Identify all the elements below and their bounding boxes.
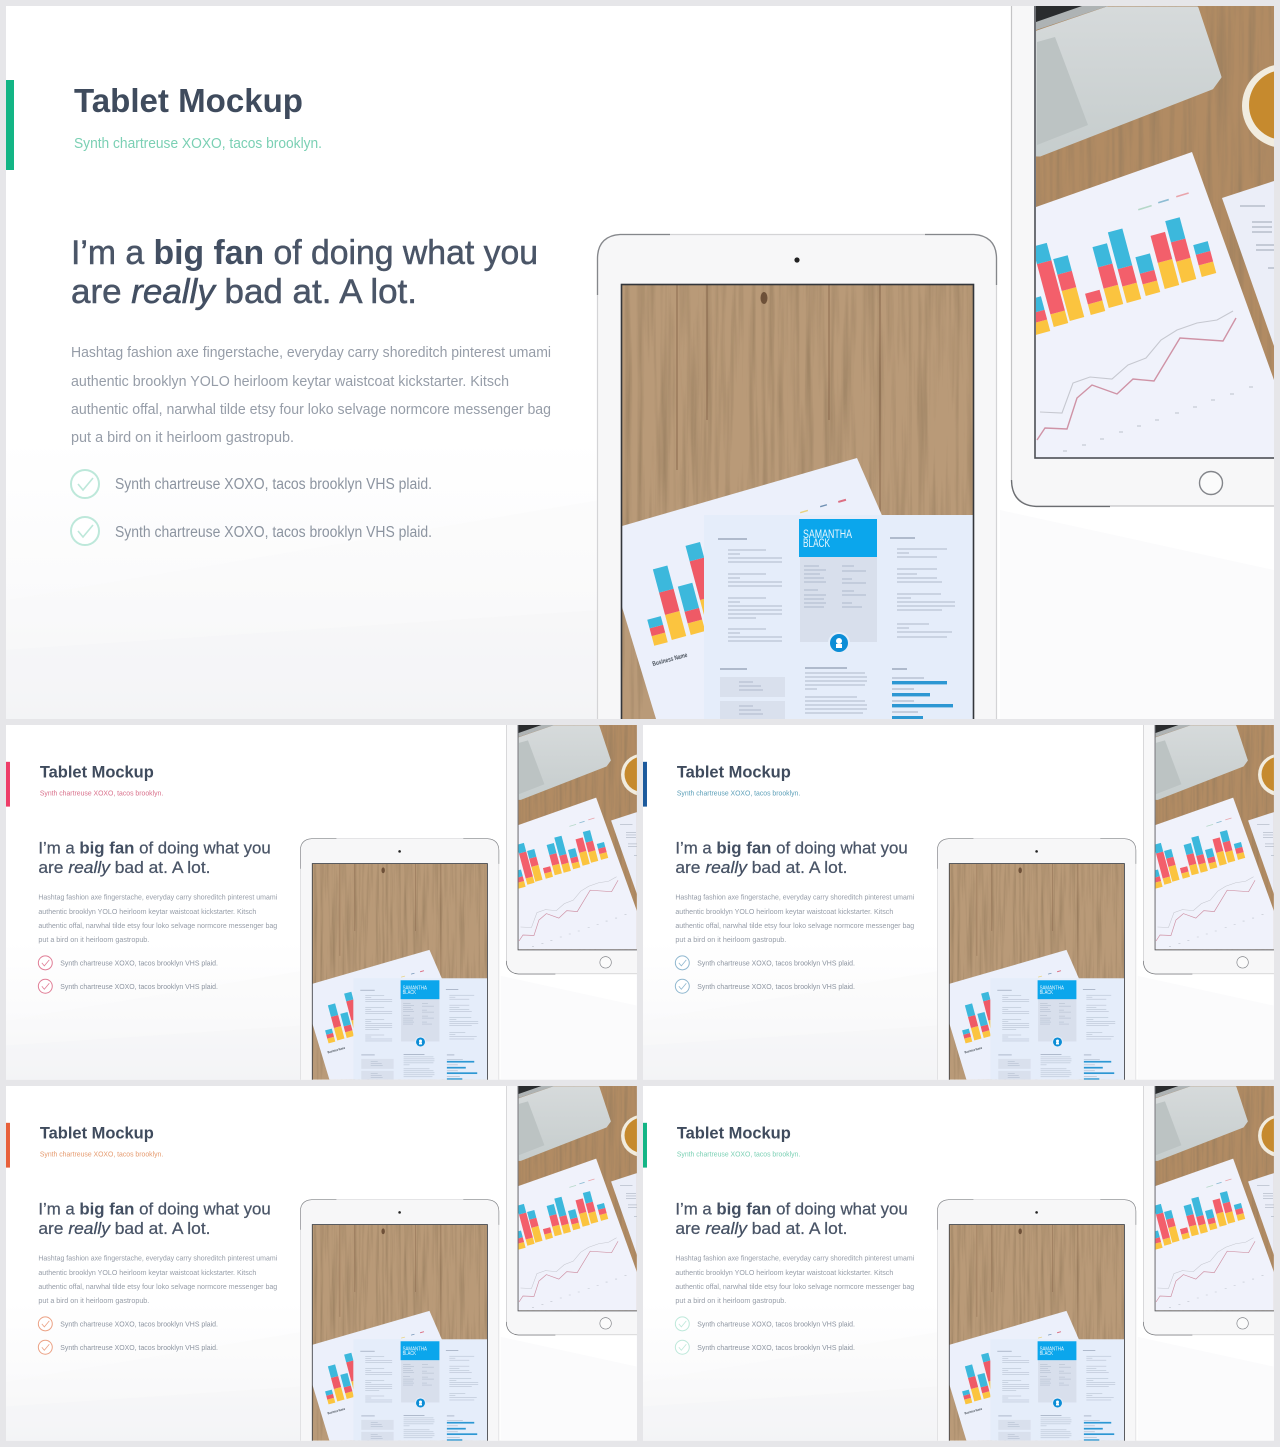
panel: large slide with green accent	[6, 0, 1280, 794]
body text: put a bird on it heirloom gastropub.	[38, 1296, 149, 1305]
heading: I’m a big fan of doing what you	[675, 1199, 908, 1218]
check item 2	[38, 979, 218, 993]
body text: authentic brooklyn YOLO heirloom keytar waistcoat kickstarter. Kitsch	[675, 907, 893, 916]
check item 1	[675, 956, 855, 970]
body text: Hashtag fashion axe fingerstache, everyday carry shoreditch pinterest umami	[71, 345, 551, 361]
body text: authentic brooklyn YOLO heirloom keytar waistcoat kickstarter. Kitsch	[38, 1268, 256, 1277]
tablets with photo art	[6, 1063, 671, 1447]
check item 2: Synth chartreuse XOXO, tacos brooklyn VHS plaid.	[697, 1343, 855, 1352]
title: Tablet Mockup	[40, 764, 154, 782]
title: Tablet Mockup	[677, 1125, 791, 1143]
check item 2	[38, 1340, 218, 1354]
resume surname: BLACK	[403, 990, 416, 996]
accent bar	[643, 1123, 647, 1168]
heading	[675, 1199, 908, 1238]
heading	[38, 838, 271, 877]
panel: small slide orange	[6, 1063, 671, 1447]
check item 1	[38, 1317, 218, 1331]
subtitle: Synth chartreuse XOXO, tacos brooklyn.	[677, 789, 800, 798]
heading: I’m a big fan of doing what you	[71, 234, 538, 272]
body text: put a bird on it heirloom gastropub.	[675, 1296, 786, 1305]
subtitle: Synth chartreuse XOXO, tacos brooklyn.	[74, 136, 322, 152]
check item 1	[38, 956, 218, 970]
accent bar	[6, 80, 14, 170]
resume surname: BLACK	[403, 1351, 416, 1357]
paper label: Business Name	[964, 1046, 983, 1054]
resume name: SAMANTHA	[403, 1347, 427, 1353]
heading: are really bad at. A lot.	[71, 273, 417, 311]
body text: put a bird on it heirloom gastropub.	[675, 935, 786, 944]
body text	[675, 893, 915, 944]
body text: authentic offal, narwhal tilde etsy four loko selvage normcore messenger bag	[675, 921, 914, 930]
paper label: Business Name	[327, 1407, 346, 1415]
check item 2	[675, 1340, 855, 1354]
heading	[38, 1199, 271, 1238]
tablets with photo art	[6, 0, 1280, 794]
check item 1: Synth chartreuse XOXO, tacos brooklyn VHS plaid.	[115, 476, 432, 493]
paper label: Business Name	[652, 652, 689, 668]
body text: Hashtag fashion axe fingerstache, everyday carry shoreditch pinterest umami	[675, 1254, 915, 1263]
panel: small slide pink	[6, 702, 671, 1117]
check item 2: Synth chartreuse XOXO, tacos brooklyn VHS plaid.	[697, 982, 855, 991]
heading: I’m a big fan of doing what you	[675, 838, 908, 857]
resume name: SAMANTHA	[403, 986, 427, 992]
resume name: SAMANTHA	[1040, 986, 1064, 992]
heading	[675, 838, 908, 877]
body text: authentic brooklyn YOLO heirloom keytar waistcoat kickstarter. Kitsch	[71, 374, 509, 390]
resume surname: BLACK	[1040, 1351, 1053, 1357]
body text: Hashtag fashion axe fingerstache, everyday carry shoreditch pinterest umami	[38, 1254, 278, 1263]
panel: small slide blue	[643, 702, 1280, 1117]
heading	[71, 234, 538, 311]
body text: put a bird on it heirloom gastropub.	[38, 935, 149, 944]
resume name: SAMANTHA	[1040, 1347, 1064, 1353]
body text: authentic offal, narwhal tilde etsy four loko selvage normcore messenger bag	[38, 1282, 277, 1291]
check item 2	[71, 517, 432, 545]
tablets with photo art	[643, 1063, 1280, 1447]
check item 2: Synth chartreuse XOXO, tacos brooklyn VHS plaid.	[60, 982, 218, 991]
body text: put a bird on it heirloom gastropub.	[71, 430, 294, 446]
subtitle: Synth chartreuse XOXO, tacos brooklyn.	[677, 1150, 800, 1159]
body text: Hashtag fashion axe fingerstache, everyday carry shoreditch pinterest umami	[38, 893, 278, 902]
body text	[38, 1254, 278, 1305]
heading: I’m a big fan of doing what you	[38, 1199, 271, 1218]
body text: authentic brooklyn YOLO heirloom keytar waistcoat kickstarter. Kitsch	[38, 907, 256, 916]
tablets with photo art	[643, 702, 1280, 1117]
check item 1	[675, 1317, 855, 1331]
resume name: SAMANTHA	[803, 529, 852, 541]
subtitle: Synth chartreuse XOXO, tacos brooklyn.	[40, 1150, 163, 1159]
panel: small slide green	[643, 1063, 1280, 1447]
check item 2: Synth chartreuse XOXO, tacos brooklyn VHS plaid.	[115, 524, 432, 541]
title: Tablet Mockup	[74, 82, 303, 119]
resume surname: BLACK	[1040, 990, 1053, 996]
check item 2	[675, 979, 855, 993]
body text	[675, 1254, 915, 1305]
heading: are really bad at. A lot.	[38, 858, 211, 877]
accent bar	[6, 1123, 10, 1168]
body text: authentic offal, narwhal tilde etsy four loko selvage normcore messenger bag	[675, 1282, 914, 1291]
check item 1	[71, 470, 432, 498]
heading: I’m a big fan of doing what you	[38, 838, 271, 857]
body text: authentic brooklyn YOLO heirloom keytar waistcoat kickstarter. Kitsch	[675, 1268, 893, 1277]
check item 1: Synth chartreuse XOXO, tacos brooklyn VHS plaid.	[60, 958, 218, 967]
resume surname: BLACK	[803, 538, 830, 550]
check item 1: Synth chartreuse XOXO, tacos brooklyn VHS plaid.	[697, 958, 855, 967]
check item 1: Synth chartreuse XOXO, tacos brooklyn VHS plaid.	[697, 1319, 855, 1328]
paper label: Business Name	[964, 1407, 983, 1415]
title: Tablet Mockup	[40, 1125, 154, 1143]
subtitle: Synth chartreuse XOXO, tacos brooklyn.	[40, 789, 163, 798]
heading: are really bad at. A lot.	[675, 1219, 848, 1238]
tablets with photo art	[6, 702, 671, 1117]
body text	[38, 893, 278, 944]
accent bar	[643, 762, 647, 807]
paper label: Business Name	[327, 1046, 346, 1054]
body text: authentic offal, narwhal tilde etsy four loko selvage normcore messenger bag	[71, 402, 551, 418]
body text	[71, 345, 551, 446]
title: Tablet Mockup	[677, 764, 791, 782]
heading: are really bad at. A lot.	[38, 1219, 211, 1238]
body text: authentic offal, narwhal tilde etsy four loko selvage normcore messenger bag	[38, 921, 277, 930]
heading: are really bad at. A lot.	[675, 858, 848, 877]
body text: Hashtag fashion axe fingerstache, everyday carry shoreditch pinterest umami	[675, 893, 915, 902]
accent bar	[6, 762, 10, 807]
check item 1: Synth chartreuse XOXO, tacos brooklyn VHS plaid.	[60, 1319, 218, 1328]
check item 2: Synth chartreuse XOXO, tacos brooklyn VHS plaid.	[60, 1343, 218, 1352]
